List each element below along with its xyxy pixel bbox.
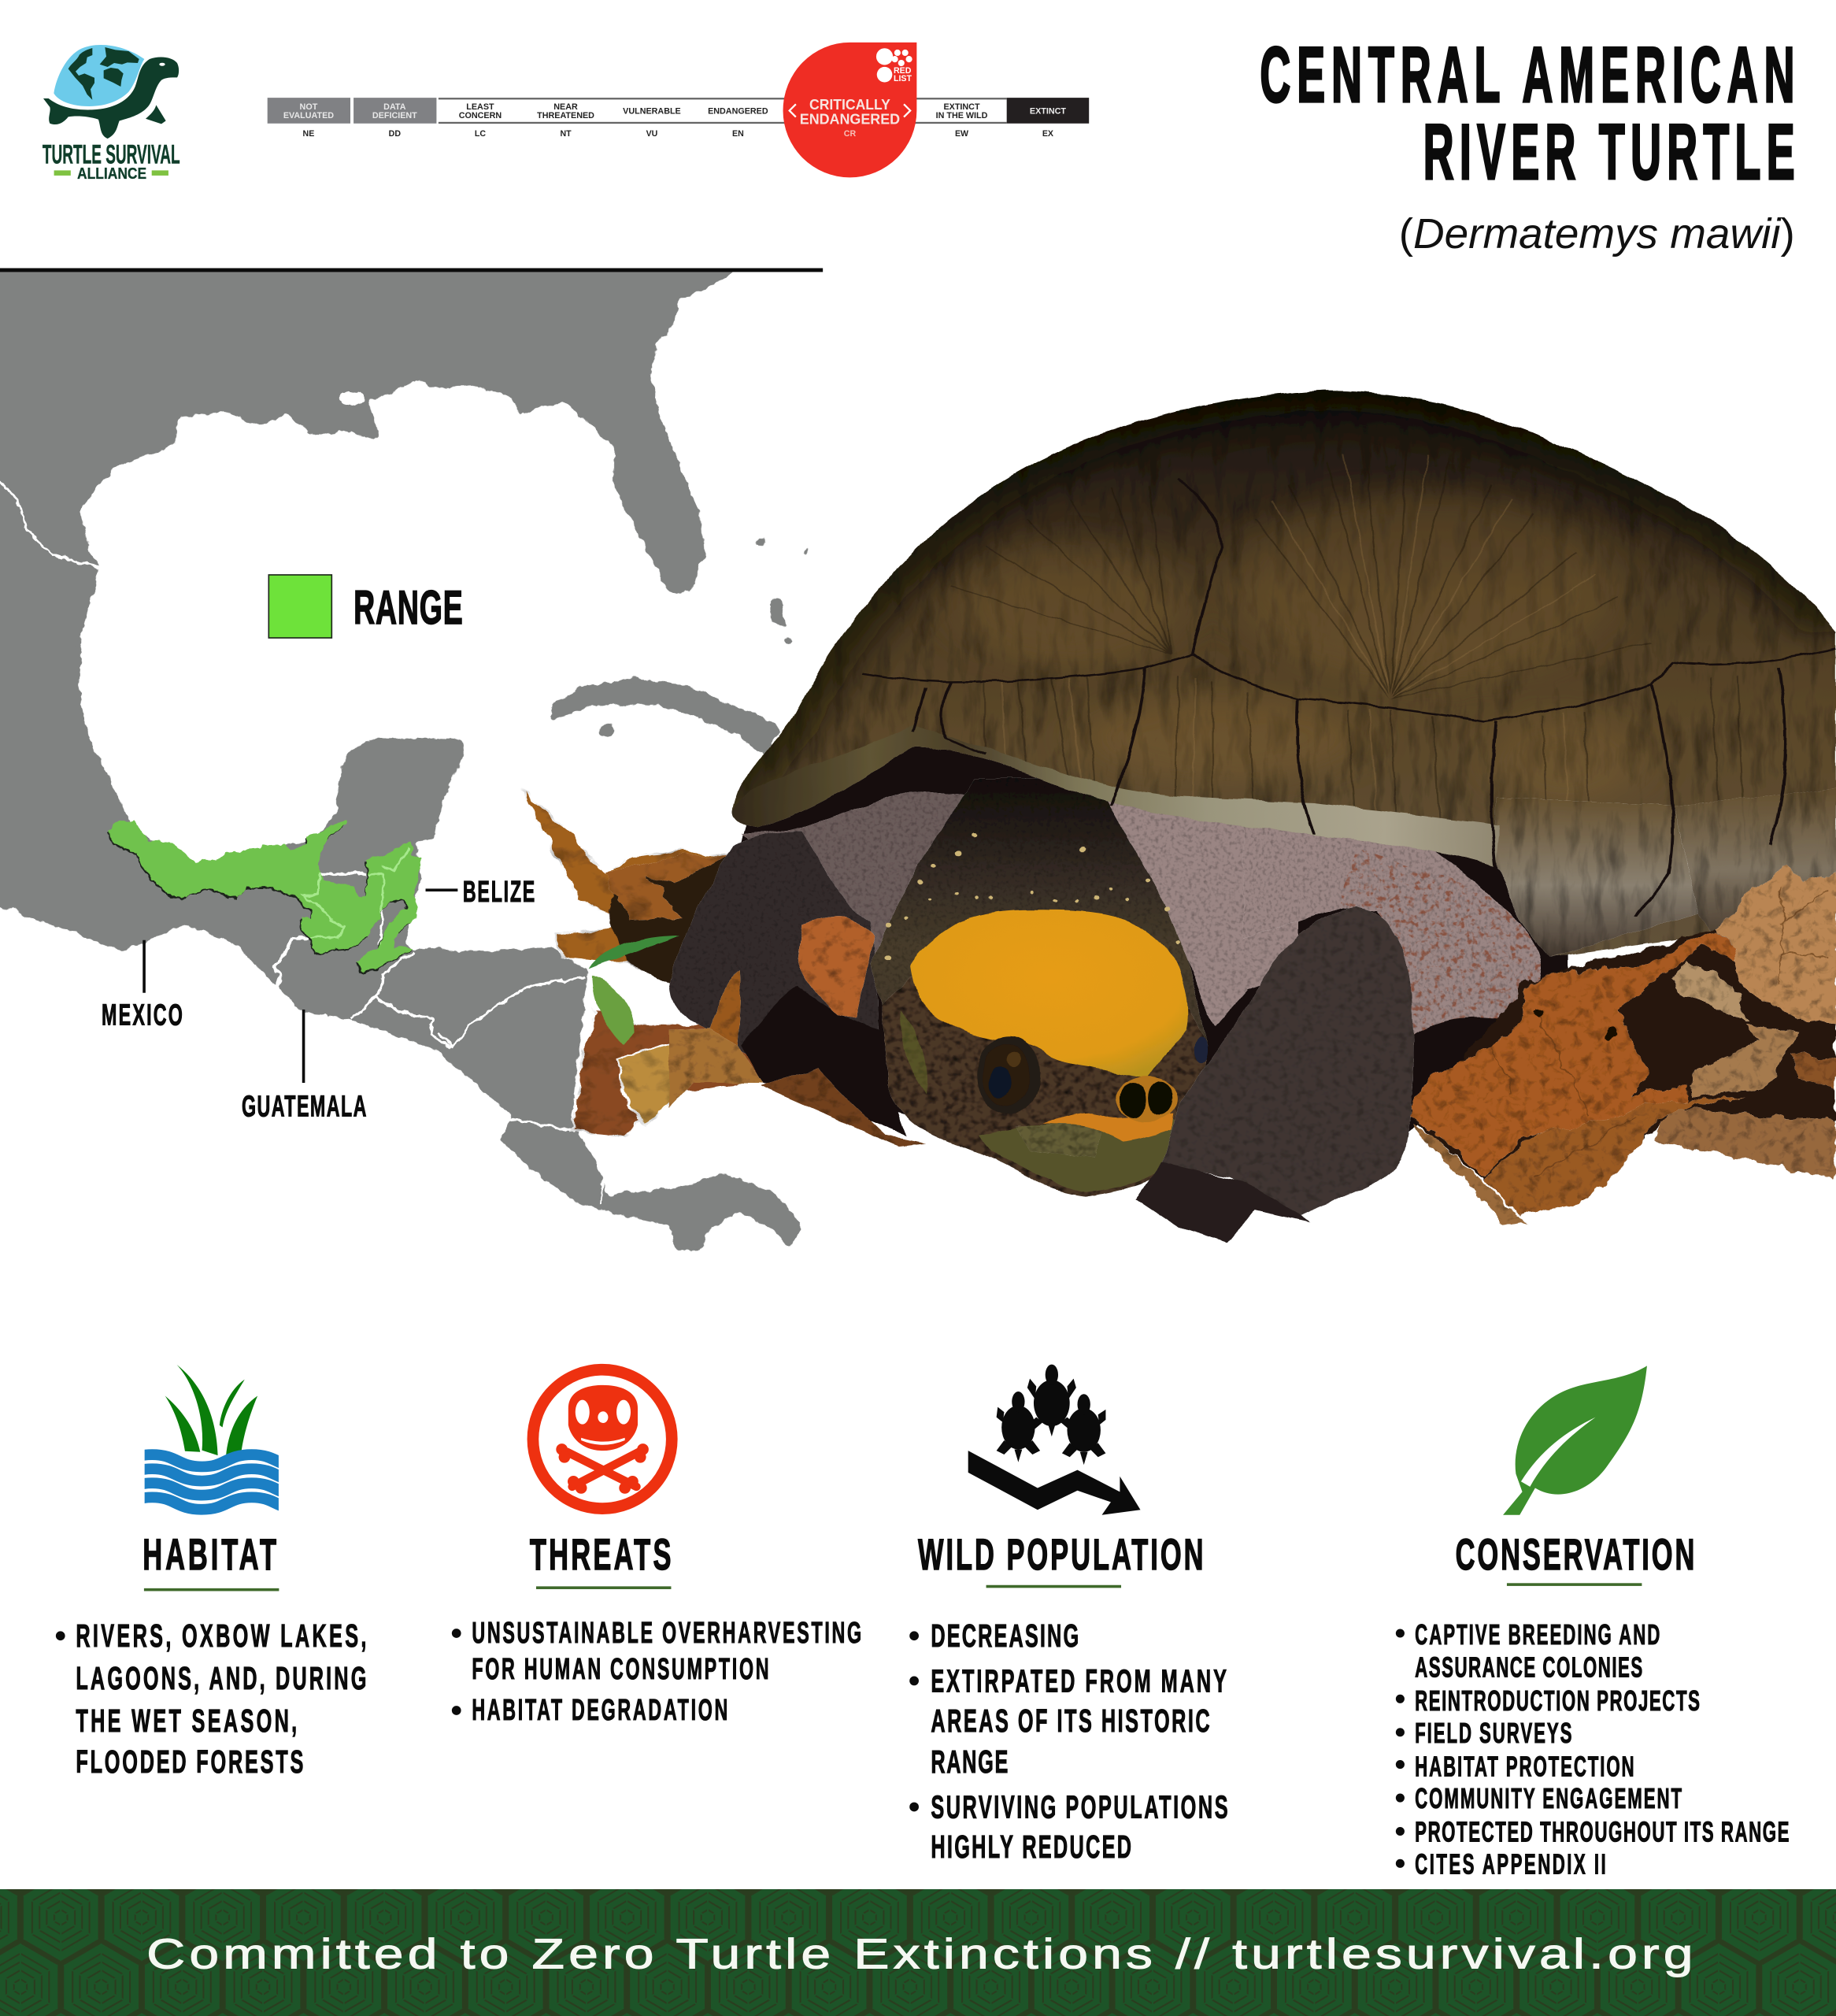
bullet list: REINTRODUCTION PROJECTS [1415,1686,1700,1717]
bullet list [452,1617,861,1727]
country borders [0,482,604,1205]
status abbreviations: EW [955,129,968,139]
vulnerable: VULNERABLE [623,107,681,117]
status abbreviations: NE [303,129,314,139]
bullet list: UNSUSTAINABLE OVERHARVESTING [472,1617,861,1650]
top right leaf [1716,865,1836,1024]
bullet list: FIELD SURVEYS [1415,1718,1571,1749]
heading: HABITAT [143,1530,276,1579]
Bahamas [755,537,809,644]
Guatemala callout [242,1010,366,1123]
near threatened: NEAR [553,102,578,112]
extinct in the wild: EXTINCT [943,102,980,112]
brown leaf on leg [798,917,875,1017]
status abbreviations: LC [475,129,486,139]
right front leg [1162,907,1413,1217]
bullet list: FLOODED FORESTS [76,1744,303,1781]
bullet list: HABITAT DEGRADATION [472,1694,727,1727]
heading: THREATS [530,1530,671,1579]
bullet list: EXTIRPATED FROM MANY [931,1663,1227,1699]
heading: WILD POPULATION [918,1530,1203,1579]
bullet list: RIVERS, OXBOW LAKES, [76,1618,366,1655]
data deficient [354,98,436,124]
bullet list: CAPTIVE BREEDING AND [1415,1620,1660,1651]
claw foot [1137,1163,1310,1243]
not evaluated [268,98,350,124]
bullet list: COMMUNITY ENGAGEMENT [1415,1784,1682,1815]
bullet list: DECREASING [931,1618,1079,1655]
critically endangered badge: ENDANGERED [800,111,900,128]
dark gaps between leaves [1412,873,1836,1215]
logo sub wordmark: ALLIANCE [77,165,146,183]
bullet list: RANGE [931,1744,1008,1781]
right leg, shoulder and claw foot [1137,815,1542,1243]
eye [977,1036,1040,1114]
status abbreviations: NT [560,129,572,139]
Jamaica [598,724,615,738]
footer tagline: Committed to Zero Turtle Extinctions // turtlesurvival.org [146,1930,1697,1977]
small leaf on paw [709,971,741,1046]
lake [339,391,365,406]
bullet list [1396,1620,1789,1881]
big centre leaf [1408,932,1737,1178]
bullet list: ASSURANCE COLONIES [1415,1652,1642,1684]
shoulder [1243,815,1542,1104]
range legend swatch [268,575,331,638]
yellow neck dots [885,833,1179,961]
Mexico callout: MEXICO [102,999,183,1032]
leaf veins and holes [1491,887,1827,1177]
shell [733,391,1836,958]
column: wild population [909,1365,1228,1866]
column: conservation [1396,1366,1789,1881]
data deficient: DATA [383,102,406,112]
left leaf litter [522,789,764,1138]
lower left leaf [669,1028,762,1108]
brown strip leaf [760,1069,927,1147]
Belize callout [426,875,535,908]
range legend label: RANGE [354,580,463,634]
bullet list: CITES APPENDIX II [1415,1849,1606,1881]
scientific name: (Dermatemys mawii ) [1399,210,1795,258]
turtle photograph illustration [522,391,1836,1243]
top rule [0,268,823,272]
critically endangered badge: CR [844,129,856,139]
data deficient: DEFICIENT [372,111,417,120]
left neck skin [742,791,975,965]
Guatemala callout: GUATEMALA [242,1090,366,1123]
least concern: LEAST [466,102,494,112]
left front leg [669,831,880,1067]
bullet list: THE WET SEASON, [76,1703,297,1740]
status abbreviations: VU [646,129,658,139]
shell underside and body base [714,727,1568,1166]
land masses [0,260,809,1250]
red list logo: LIST [894,74,912,83]
title: RIVER TURTLE [1423,108,1795,195]
bullet list: FOR HUMAN CONSUMPTION [472,1652,769,1685]
bullet list: HABITAT PROTECTION [1415,1751,1634,1783]
status abbreviations: EN [732,129,744,139]
range area [108,819,421,973]
snout [1042,1077,1178,1142]
Cuba [551,678,783,758]
logo green bars [54,170,168,176]
small dark leaves at right [1793,1053,1836,1089]
status abbreviations [303,129,1053,139]
twig [1412,1124,1527,1226]
green leaves [590,935,679,1045]
left neck skin and shoulder, left leg, head [669,778,1299,1196]
critically endangered badge [783,43,916,177]
near threatened: THREATENED [537,111,594,120]
status abbreviations: EX [1042,129,1053,139]
extinct: EXTINCT [1030,107,1066,117]
heading: CONSERVATION [1456,1530,1694,1579]
critically endangered badge: CRITICALLY [809,96,890,113]
logo wordmark: TURTLE SURVIVAL [43,139,180,169]
extinct in the wild: IN THE WILD [936,111,988,120]
logo: Turtle Survival Alliance [43,45,180,183]
not evaluated: EVALUATED [283,111,334,120]
face [882,977,1208,1196]
bullet list: LAGOONS, AND, DURING [76,1661,366,1697]
icon: three turtles over falling arrow [968,1365,1141,1515]
neck [870,778,1208,1114]
shadow by shoulder [1405,1017,1526,1104]
bullet list [56,1618,366,1781]
title [1260,31,1795,195]
bullet list [909,1618,1228,1866]
lower leaf [1484,1098,1746,1215]
not evaluated: NOT [300,102,318,112]
shadow under left leg [742,987,906,1136]
stick [1654,1109,1836,1180]
title: CENTRAL AMERICAN [1260,31,1794,118]
shell rim [733,726,1500,866]
column: habitat [56,1365,366,1781]
yellow head patch [910,910,1188,1078]
status abbreviations: DD [389,129,401,139]
endangered: ENDANGERED [708,107,768,117]
bullet list: AREAS OF ITS HISTORIC [931,1703,1210,1740]
jaw [979,1120,1176,1192]
lower right shell [1496,797,1698,958]
growth striations [951,446,1745,913]
extinct [1007,98,1089,124]
red list logo: RED [894,66,912,76]
icon: grass and water [102,1365,302,1510]
Belize callout: BELIZE [463,875,535,908]
green cheek [900,1011,927,1095]
bullet list: PROTECTED THROUGHOUT ITS RANGE [1415,1817,1789,1848]
map of Central America [0,260,809,1250]
least concern [459,102,502,120]
right leaf litter [1408,865,1836,1226]
bullet list: HIGHLY REDUCED [931,1829,1131,1866]
red list logo [876,48,912,83]
right neck skin [1095,784,1299,1027]
column: threats [452,1369,861,1727]
footer banner [0,1889,1836,2016]
bullet list: SURVIVING POPULATIONS [931,1789,1228,1825]
icon: skull and crossbones [533,1369,672,1509]
least concern: CONCERN [459,111,502,120]
far eye [1195,1037,1208,1063]
icon: leaf [1503,1366,1647,1515]
shell scute seams [862,480,1836,918]
Mexico callout [102,940,183,1032]
IUCN red list status bar [268,43,1089,177]
near threatened [537,102,594,120]
lit scute patches and dome shading [732,389,1836,818]
pale torn leaves [1671,959,1748,1021]
extinct in the wild [936,102,988,120]
